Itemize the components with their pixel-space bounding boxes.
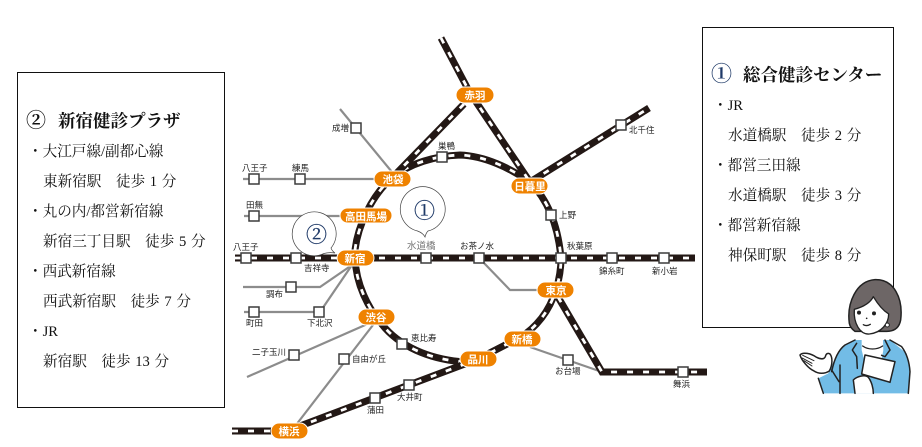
heading: Shinjuku Plaza: ② — [26, 109, 46, 132]
holding hand — [853, 376, 873, 393]
heading: Sogo Center: ① — [711, 62, 732, 86]
heading: Shinjuku Plaza: 新宿健診プラザ — [58, 111, 180, 131]
station names: 自由が丘 — [352, 354, 387, 364]
lapels — [852, 343, 857, 368]
station names: 水道橋 — [407, 240, 436, 252]
major station labels: 横浜 — [278, 425, 300, 438]
major station labels: 高田馬場 — [345, 210, 387, 223]
access list: Shinjuku Plaza: ・JR — [28, 324, 58, 340]
access list: Sogo Center: ・都営新宿線 — [713, 216, 801, 234]
station names: 八王子 — [242, 163, 268, 173]
access list: Shinjuku Plaza: 新宿駅 徒歩 13 分 — [43, 352, 169, 370]
station boxes — [241, 120, 688, 403]
access list: Sogo Center — [713, 98, 862, 264]
station names: 成増 — [332, 123, 349, 133]
grey branch lines — [243, 109, 602, 425]
major station labels: 赤羽 — [464, 90, 486, 102]
major station labels — [271, 87, 574, 439]
access list: Sogo Center: 水道橋駅 徒歩 2 分 — [728, 126, 862, 144]
access list: Shinjuku Plaza: ・西武新宿線 — [28, 262, 116, 280]
heading: Sogo Center: 総合健診センター — [743, 65, 882, 85]
panel: Sogo Kenshin Center access — [702, 28, 894, 328]
access list: Shinjuku Plaza: 西武新宿駅 徒歩 7 分 — [43, 292, 191, 310]
station names — [233, 123, 691, 415]
facial features — [857, 311, 889, 327]
hair — [849, 280, 901, 331]
major station labels: 東京 — [546, 284, 567, 297]
access list: Sogo Center: ・都営三田線 — [713, 157, 801, 174]
access list: Shinjuku Plaza: ・大江戸線/副都心線 — [28, 143, 164, 160]
major station labels: 日暮里 — [514, 180, 546, 193]
document — [862, 355, 895, 382]
station names: 町田 — [246, 318, 263, 328]
station names: 上野 — [559, 210, 577, 220]
major station labels: 品川 — [468, 354, 488, 366]
station names: 新小岩 — [652, 266, 678, 276]
jacket fill — [818, 340, 910, 393]
access list: Shinjuku Plaza: 新宿三丁目駅 徒歩 5 分 — [43, 232, 206, 250]
major station labels: 池袋 — [382, 173, 404, 186]
station names: 練馬 — [292, 163, 309, 173]
station names: 下北沢 — [307, 318, 333, 328]
access list: Shinjuku Plaza: ・丸の内/都営新宿線 — [28, 202, 164, 220]
station names: 大井町 — [397, 392, 423, 402]
station names: 錦糸町 — [599, 266, 625, 276]
station names: 舞浜 — [673, 379, 691, 389]
station names: 巣鴨 — [438, 141, 456, 151]
station names: 秋葉原 — [567, 241, 593, 251]
face — [854, 297, 889, 334]
major station labels: 新橋 — [512, 333, 533, 346]
panel: Shinjuku Kenshin Plaza access — [18, 72, 224, 408]
station names: 調布 — [266, 289, 283, 299]
station names: 北千住 — [629, 125, 655, 135]
black rail lines — [232, 38, 707, 431]
jacket outline — [818, 340, 910, 393]
station names: 恵比寿 — [411, 333, 437, 343]
station names: お茶ノ水 — [460, 241, 495, 251]
map balloon ② — [292, 212, 336, 256]
major station labels: 渋谷 — [366, 311, 387, 324]
access list: Sogo Center: 神保町駅 徒歩 8 分 — [728, 246, 862, 264]
station names: 八王子 — [233, 242, 259, 252]
station names: お台場 — [555, 366, 581, 376]
hand — [800, 353, 832, 373]
station names: 二子玉川 — [252, 347, 286, 357]
railway map — [232, 38, 707, 439]
access list: Sogo Center: 水道橋駅 徒歩 3 分 — [728, 186, 862, 204]
access list: Shinjuku Plaza: 東新宿駅 徒歩 1 分 — [43, 172, 177, 190]
access list: Shinjuku Plaza — [28, 143, 206, 370]
station names: 田無 — [246, 200, 264, 210]
map balloon ①: ① — [414, 199, 435, 223]
station names: 蒲田 — [367, 405, 384, 415]
illustration: woman presenting — [800, 280, 913, 393]
map balloon ②: ② — [306, 223, 327, 247]
blouse and neck — [862, 332, 883, 359]
station names: 吉祥寺 — [304, 263, 330, 273]
major station labels: 新宿 — [344, 252, 366, 265]
map balloon ① — [400, 187, 445, 237]
access list: Sogo Center: ・JR — [713, 98, 743, 114]
